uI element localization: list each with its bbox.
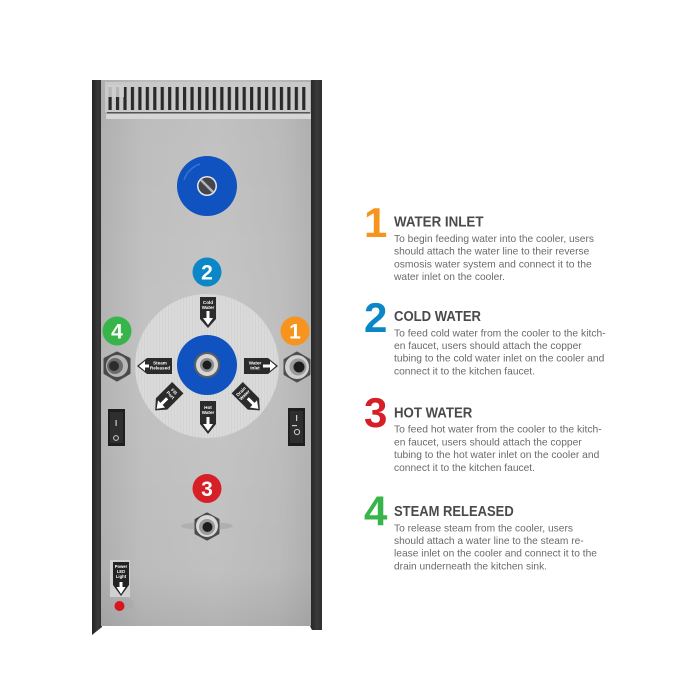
arrow label: lower right diagonal (232, 382, 265, 416)
power LED light label: Light (116, 574, 127, 579)
badge 1 (280, 316, 310, 346)
body hot water: connect it to the kitchen faucet. (394, 462, 535, 474)
body steam released: should attach a water line to the steam re- (394, 535, 584, 547)
arrow label: lower left diagonal (150, 382, 183, 416)
arrow label: cold water: Water (202, 305, 215, 310)
hot water fitting (181, 514, 233, 539)
heading steam released: STEAM RELEASED (394, 504, 514, 520)
body cold water: To feed cold water from the cooler to the kitch- (394, 327, 606, 339)
right dark side strip (310, 80, 322, 630)
arrow label: hot water: Hot (204, 405, 212, 410)
arrow label: water inlet: Inlet (250, 366, 260, 370)
numeral 2: 2 (364, 294, 387, 341)
body cold water: tubing to the cold water inlet on the cooler and (394, 353, 604, 365)
body hot water: tubing to the hot water inlet on the cooler and (394, 449, 599, 461)
body water inlet: water inlet on the cooler. (393, 271, 505, 283)
numeral 4: 4 (364, 488, 388, 534)
steam released fitting (105, 353, 129, 380)
body water inlet: To begin feeding water into the cooler, users (394, 233, 594, 245)
body water inlet (393, 233, 594, 283)
cooler unit (92, 80, 322, 635)
body steam released: To release steam from the cooler, users (394, 522, 573, 534)
heading cold water: COLD WATER (394, 309, 481, 325)
badge 4 (102, 316, 132, 346)
heading water inlet: WATER INLET (394, 214, 484, 230)
arrow label: hot water (200, 401, 216, 434)
power LED light label (110, 560, 130, 597)
body steam released: drain underneath the kitchen sink. (394, 560, 547, 572)
light brushed circle label (135, 294, 279, 438)
badge 2 (192, 258, 222, 286)
arrow label: steam released: Steam (153, 360, 167, 366)
numeral 1: 1 (364, 199, 387, 246)
numeral 3: 3 (364, 389, 387, 436)
center blue grommet with fitting (177, 335, 237, 395)
badge 3 (192, 474, 222, 503)
right rocker switch (288, 408, 305, 446)
power LED light label: Power (115, 564, 128, 569)
arrow label: cold water (200, 297, 216, 328)
arrow label: hot water: Water (202, 410, 215, 415)
left dark side strip (92, 80, 102, 635)
arrow label: steam released (137, 358, 172, 374)
badge 3: 3 (201, 478, 213, 501)
body steam released (394, 522, 597, 572)
section 3: hot water (364, 389, 602, 474)
power LED light label: LED (117, 569, 125, 574)
arrow label: lower left diagonal: Port (165, 390, 176, 400)
red power LED (114, 598, 134, 611)
arrow label: lower right diagonal: Drain (235, 386, 247, 397)
body hot water: en faucet, users should attach the copper (394, 436, 582, 448)
body hot water (394, 424, 602, 474)
top vent grille (105, 82, 311, 119)
heading hot water: HOT WATER (394, 405, 473, 421)
section 1: water inlet (364, 199, 594, 283)
section 4: steam released (364, 488, 597, 572)
badge 1: 1 (289, 320, 301, 344)
water inlet fitting (285, 353, 309, 381)
arrow label: lower right diagonal: Water (238, 389, 251, 401)
body cold water (394, 327, 606, 378)
arrow label: steam released: Released (150, 366, 170, 370)
arrow label: lower left diagonal: Fill (170, 387, 178, 396)
body hot water: To feed hot water from the cooler to the kitch- (394, 424, 602, 436)
body cold water: connect it to the kitchen faucet. (394, 366, 535, 378)
body water inlet: should attach the water line to their reverse (394, 246, 589, 258)
top blue grommet with fitting (177, 156, 237, 216)
body cold water: en faucet, users should attach the copper (394, 340, 582, 352)
body water inlet: osmosis water system and connect it to the (394, 258, 592, 270)
arrow label: water inlet: Water (249, 360, 262, 366)
arrow label: cold water: Cold (203, 300, 213, 305)
section 2: cold water (364, 294, 606, 378)
badge 2: 2 (201, 262, 213, 284)
badge 4: 4 (111, 320, 123, 344)
arrow label: water inlet (244, 358, 278, 374)
stainless steel panel (101, 80, 311, 626)
body steam released: lease inlet on the cooler and connect it to the (394, 548, 597, 560)
left rocker switch (108, 409, 125, 446)
